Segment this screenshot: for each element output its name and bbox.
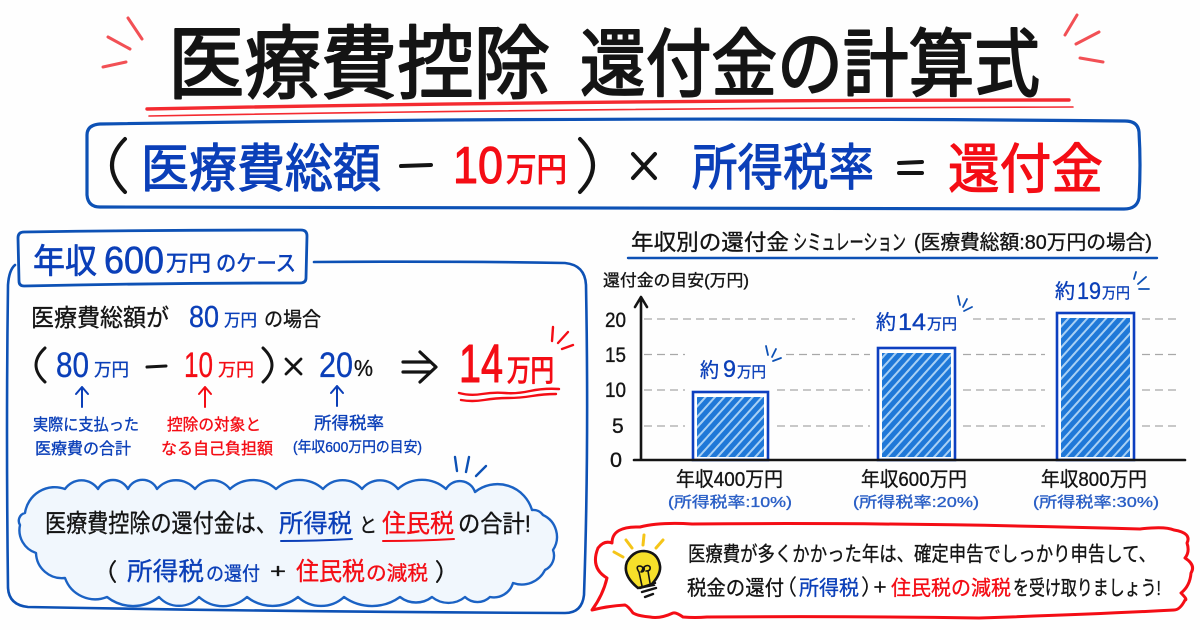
bar 800 <box>1057 313 1134 460</box>
case formula: 20 <box>319 346 353 385</box>
tax rate: 所得税率 <box>692 140 874 196</box>
case tag: 万円 <box>166 251 211 276</box>
cloud line 2: 住民税 <box>296 558 365 586</box>
value label 600: 14 <box>898 309 926 336</box>
x labels: (所得税率:20%) <box>853 494 979 511</box>
x labels: (所得税率:10%) <box>668 494 792 511</box>
icon: light bulb <box>614 535 663 597</box>
x labels: 年収400万円 <box>676 468 783 491</box>
panel: tip bubble <box>592 523 1193 618</box>
value label 600: 万円 <box>927 316 957 333</box>
case tag: 年収 <box>33 243 97 281</box>
case formula: 80 <box>56 346 89 385</box>
minus <box>401 165 431 166</box>
value label 400: 約 <box>700 359 719 382</box>
title: 医療費控除 <box>168 20 550 109</box>
arrows and notes: なる自己負担額 <box>161 440 273 458</box>
case formula: 10 <box>184 346 213 385</box>
chart heading: 年収別の還付金 <box>631 230 789 255</box>
y ticks: 10 <box>605 379 626 402</box>
y ticks: 5 <box>612 415 624 438</box>
x labels: (所得税率:30%) <box>1033 494 1159 511</box>
arrows and notes: 実際に支払った <box>33 416 139 434</box>
case formula: % <box>354 355 373 381</box>
cloud callout <box>19 457 557 606</box>
case tag: 600 <box>104 240 164 282</box>
case condition: 医療費総額が <box>31 305 169 332</box>
case formula: 万円 <box>218 360 254 380</box>
case tag: のケース <box>216 251 296 276</box>
value label 800 <box>1055 272 1149 305</box>
arrows and notes: 医療費の合計 <box>35 440 131 458</box>
cloud line 2 <box>110 558 442 586</box>
case condition: の場合 <box>264 308 321 331</box>
title sparks left <box>103 18 142 67</box>
title sparks right <box>1065 15 1103 62</box>
cloud line 1: 所得税 <box>279 510 352 538</box>
10万円: 万円 <box>506 151 567 188</box>
tip text line 2: 税金の還付 <box>687 577 784 600</box>
panel: case 600 <box>7 230 587 613</box>
cloud line 2: の減税 <box>366 562 428 585</box>
cloud line 1: 住民税 <box>382 510 454 538</box>
equals <box>899 162 922 173</box>
result 14万円: 万円 <box>507 355 554 388</box>
cloud line 2: 所得税 <box>127 558 204 586</box>
x labels: 年収600万円 <box>861 468 967 491</box>
case condition: 万円 <box>224 311 257 330</box>
bar chart <box>605 297 1185 472</box>
value label 800: 19 <box>1077 278 1101 305</box>
y axis title: 還付金の目安(万円) <box>603 271 749 290</box>
arrows and notes: 控除の対象と <box>167 416 261 434</box>
value label 800: 約 <box>1055 280 1075 303</box>
y ticks: 15 <box>605 344 626 367</box>
cloud line 1: 医療費控除の還付金は、 <box>45 510 277 538</box>
case condition <box>31 299 321 334</box>
refund: 還付金 <box>948 140 1103 200</box>
value label 400 <box>700 346 781 383</box>
case condition: 80 <box>189 299 219 334</box>
cloud sparks <box>455 457 486 476</box>
medical total: 医療費総額 <box>141 141 381 199</box>
value label 400: 9 <box>723 356 736 383</box>
case tag <box>18 230 307 286</box>
cloud line 1: の合計! <box>458 511 531 538</box>
axes <box>634 297 1185 460</box>
value label 400: 万円 <box>737 364 766 381</box>
tip text line 2 <box>687 577 1161 600</box>
grid lines <box>644 319 1181 426</box>
close paren <box>580 139 593 192</box>
x labels: 年収800万円 <box>1041 468 1147 491</box>
x labels <box>668 468 1159 511</box>
y ticks: 0 <box>610 449 622 472</box>
cloud line 1 <box>45 510 531 541</box>
chart heading: シミュレーション <box>793 230 906 255</box>
arrows and notes: (年収600万円の目安) <box>293 439 422 456</box>
y ticks: 20 <box>605 309 626 332</box>
cloud line 1: と <box>359 515 377 537</box>
title <box>168 20 1040 109</box>
10万円 <box>453 137 567 195</box>
times <box>633 154 655 178</box>
arrows and notes: 所得税率 <box>314 414 384 433</box>
cloud line 2: の還付 <box>206 563 260 585</box>
arrows and notes <box>33 386 422 458</box>
panel: main formula <box>87 119 1140 209</box>
10万円: 10 <box>453 137 503 195</box>
open paren <box>112 139 125 192</box>
cloud line 2: + <box>270 561 286 583</box>
chart heading: (医療費総額:80万円の場合) <box>914 231 1152 254</box>
tip text line 2: を受け取りましょう! <box>1013 577 1161 600</box>
case formula: 万円 <box>94 360 129 380</box>
bar 400 <box>693 392 768 460</box>
title double underline <box>147 100 1073 116</box>
tip text line 2: 所得税 <box>799 577 859 600</box>
value label 600: 約 <box>876 311 896 334</box>
title: 還付金の計算式 <box>580 23 1040 106</box>
result 14万円 <box>459 327 573 401</box>
y ticks <box>605 309 626 472</box>
result 14万円: 14 <box>459 334 503 394</box>
chart heading <box>628 230 1157 258</box>
value label 800: 万円 <box>1102 285 1130 302</box>
case formula <box>36 346 436 385</box>
bar 600 <box>878 348 955 460</box>
value label 600 <box>876 296 972 336</box>
tip text line 2: 住民税の減税 <box>891 577 1011 600</box>
